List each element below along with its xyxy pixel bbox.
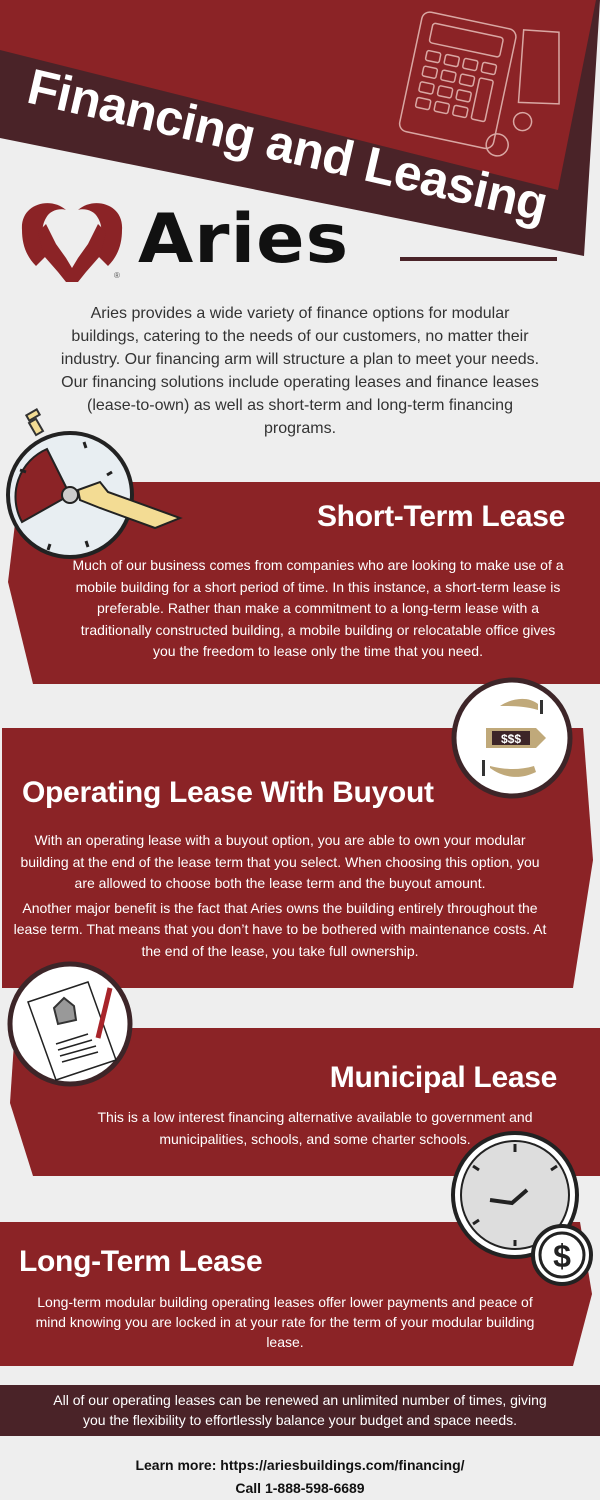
callout: renewal bar: you the flexibility to effortlessly balance your budget and space needs. <box>83 1412 517 1428</box>
heading: Short-Term Lease <box>317 500 565 533</box>
logo <box>22 200 349 282</box>
footer: Call 1-888-598-6689 <box>235 1480 365 1496</box>
title: Financing and Leasing <box>23 58 553 232</box>
body text: With an operating lease with a buyout option, you are able to own your modular building at the end of the lease term that you select. When choosing this option, you are allowed to choose both the lease term and the buyout amount. Another major benefit is the fact that Aries owns the building entirely throughout the lease term. That means that you don’t have to be bothered with maintenance costs. At the end of the lease, you take full ownership. <box>14 832 546 958</box>
panel: municipal lease <box>10 1028 600 1176</box>
wordmark: Aries <box>138 200 349 279</box>
icon: document <box>8 962 132 1086</box>
footer <box>135 1457 465 1496</box>
body text: Long-term modular building operating leases offer lower payments and peace of mind knowing you are locked in at your rate for the term of your modular building lease. <box>36 1294 534 1350</box>
icon: clock with dollar <box>451 1131 593 1286</box>
icon: ram: ® <box>114 271 120 280</box>
panel: long-term lease <box>0 1222 592 1366</box>
icon: money hands: $$$ <box>501 732 521 746</box>
icon: clock with dollar: $ <box>553 1238 571 1274</box>
heading: Long-Term Lease <box>19 1245 262 1278</box>
panel: operating lease with buyout <box>2 728 593 988</box>
body text: Much of our business comes from companies who are looking to make use of a mobile building for a short period of time. In this instance, a short-term lease is preferable. Rather than make a commitment to a long-term lease with a traditionally constructed building, a mobile building or relocatable office gives you the freedom to lease only the time that you need. <box>72 557 564 659</box>
panel: short-term lease <box>8 482 600 684</box>
callout: renewal bar <box>0 1385 600 1436</box>
intro text: Aries provides a wide variety of finance options for modular buildings, catering to the needs of our customers, no matter their industry. Our financing arm will structure a plan to meet your needs. Our financing solutions include operating leases and finance leases (lease-to-own) as well as short-term and long-term financing programs. <box>61 305 539 437</box>
body text: This is a low interest financing alternative available to government and municipalities, schools, and some charter schools. <box>97 1109 533 1146</box>
heading: Municipal Lease <box>330 1061 557 1094</box>
icon: money hands <box>452 678 572 798</box>
icon: calculator and money <box>397 4 574 166</box>
icon: stopwatch <box>6 408 182 559</box>
footer: Learn more: https://ariesbuildings.com/financing/ <box>135 1457 465 1473</box>
heading: Operating Lease With Buyout <box>22 776 434 809</box>
icon: ram <box>22 203 122 282</box>
header band <box>0 0 600 261</box>
callout: renewal bar: All of our operating leases can be renewed an unlimited number of times, giving <box>53 1392 547 1408</box>
